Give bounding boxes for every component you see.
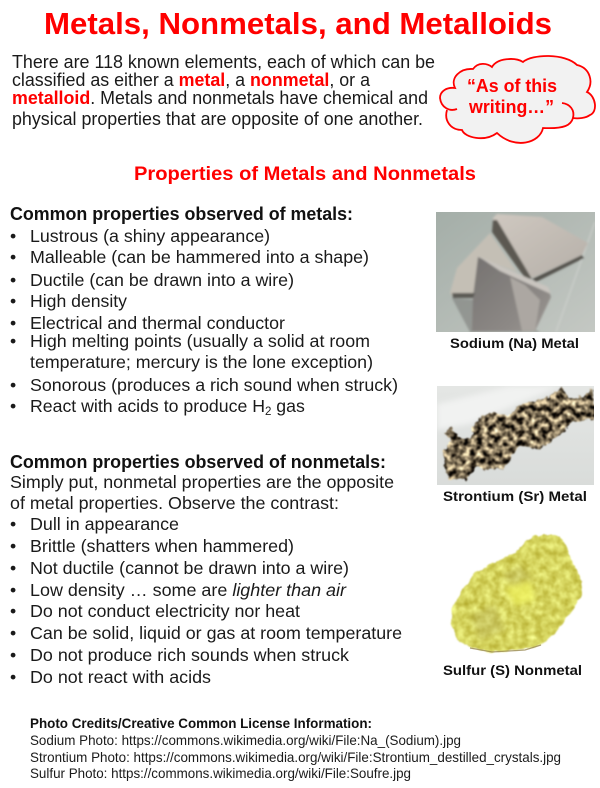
- nonmetals properties list: •: [10, 623, 16, 643]
- metals properties list: •: [10, 226, 16, 246]
- nonmetals properties list: •: [10, 667, 16, 687]
- photo credits: Strontium Photo: https://commons.wikimedia.org/wiki/File:Strontium_destilled_crystals.jpg: [30, 749, 561, 765]
- metals properties list: Malleable (can be hammered into a shape): [30, 247, 369, 267]
- photo credits: [30, 715, 561, 781]
- metals properties list: •: [10, 375, 16, 395]
- intro paragraph: There are 118 known elements, each of which can be: [12, 52, 435, 72]
- metals properties list: gas: [271, 396, 305, 416]
- callout: as of this writing cloud: writing…”: [468, 96, 554, 117]
- metals properties list: High density: [30, 291, 127, 311]
- metals properties list: •: [10, 313, 16, 333]
- photo: sodium metal: [436, 212, 595, 332]
- nonmetals properties list: Dull in appearance: [30, 514, 179, 534]
- metals properties list: 2: [265, 406, 271, 418]
- photo credits: Sulfur Photo: https://commons.wikimedia.org/wiki/File:Soufre.jpg: [30, 765, 411, 781]
- photo: sulfur nonmetal: [451, 535, 582, 652]
- nonmetals properties list: Do not react with acids: [30, 667, 211, 687]
- callout: as of this writing cloud: [440, 56, 595, 143]
- nonmetals properties list: •: [10, 601, 16, 621]
- nonmetals properties list: •: [10, 558, 16, 578]
- nonmetals properties list: Not ductile (cannot be drawn into a wire): [30, 558, 349, 578]
- nonmetals properties list: •: [10, 514, 16, 534]
- nonmetals properties list: Brittle (shatters when hammered): [30, 536, 294, 556]
- metals properties list: Lustrous (a shiny appearance): [30, 226, 270, 246]
- title: Metals, Nonmetals, and Metalloids: [44, 6, 552, 41]
- metals properties list: [10, 204, 398, 418]
- callout: as of this writing cloud: “As of this: [467, 75, 557, 96]
- intro paragraph: classified as either a metal, a nonmetal, or a: [12, 70, 371, 90]
- nonmetals properties list: Simply put, nonmetal properties are the opposite: [10, 472, 394, 492]
- metals properties list: Ductile (can be drawn into a wire): [30, 270, 294, 290]
- nonmetals properties list: •: [10, 536, 16, 556]
- nonmetals properties list: of metal properties. Observe the contrast:: [10, 493, 339, 513]
- nonmetals properties list: •: [10, 645, 16, 665]
- caption: sodium: Sodium (Na) Metal: [450, 335, 579, 351]
- section heading: Properties of Metals and Nonmetals: [134, 164, 476, 185]
- caption: sulfur: Sulfur (S) Nonmetal: [443, 662, 582, 678]
- metals properties list: •: [10, 270, 16, 290]
- metals properties list: temperature; mercury is the lone exception): [30, 352, 373, 372]
- photo credits: Sodium Photo: https://commons.wikimedia.org/wiki/File:Na_(Sodium).jpg: [30, 732, 461, 748]
- nonmetals properties list: [10, 452, 402, 687]
- intro paragraph: physical properties that are opposite of one another.: [12, 109, 423, 129]
- nonmetals heading: Common properties observed of nonmetals:: [10, 452, 386, 472]
- intro paragraph: metalloid. Metals and nonmetals have chemical and: [12, 88, 428, 108]
- metals properties list: High melting points (usually a solid at room: [30, 331, 370, 351]
- metals properties list: •: [10, 396, 16, 416]
- intro paragraph: [12, 52, 435, 129]
- nonmetals properties list: •: [10, 580, 16, 600]
- nonmetals properties list: Do not conduct electricity nor heat: [30, 601, 300, 621]
- metals properties list: Sonorous (produces a rich sound when struck): [30, 375, 398, 395]
- nonmetals properties list: Can be solid, liquid or gas at room temperature: [30, 623, 402, 643]
- photo: strontium metal: [437, 386, 597, 485]
- nonmetals properties list: Do not produce rich sounds when struck: [30, 645, 349, 665]
- photo credits: Photo Credits/Creative Common License Information:: [30, 715, 372, 731]
- caption: strontium: Strontium (Sr) Metal: [443, 488, 587, 504]
- nonmetals properties list: Low density … some are lighter than air: [30, 580, 347, 600]
- metals heading: Common properties observed of metals:: [10, 204, 353, 224]
- metals properties list: •: [10, 247, 16, 267]
- metals properties list: •: [10, 291, 16, 311]
- metals properties list: React with acids to produce H: [30, 396, 265, 416]
- metals properties list: Electrical and thermal conductor: [30, 313, 285, 333]
- metals properties list: •: [10, 331, 16, 351]
